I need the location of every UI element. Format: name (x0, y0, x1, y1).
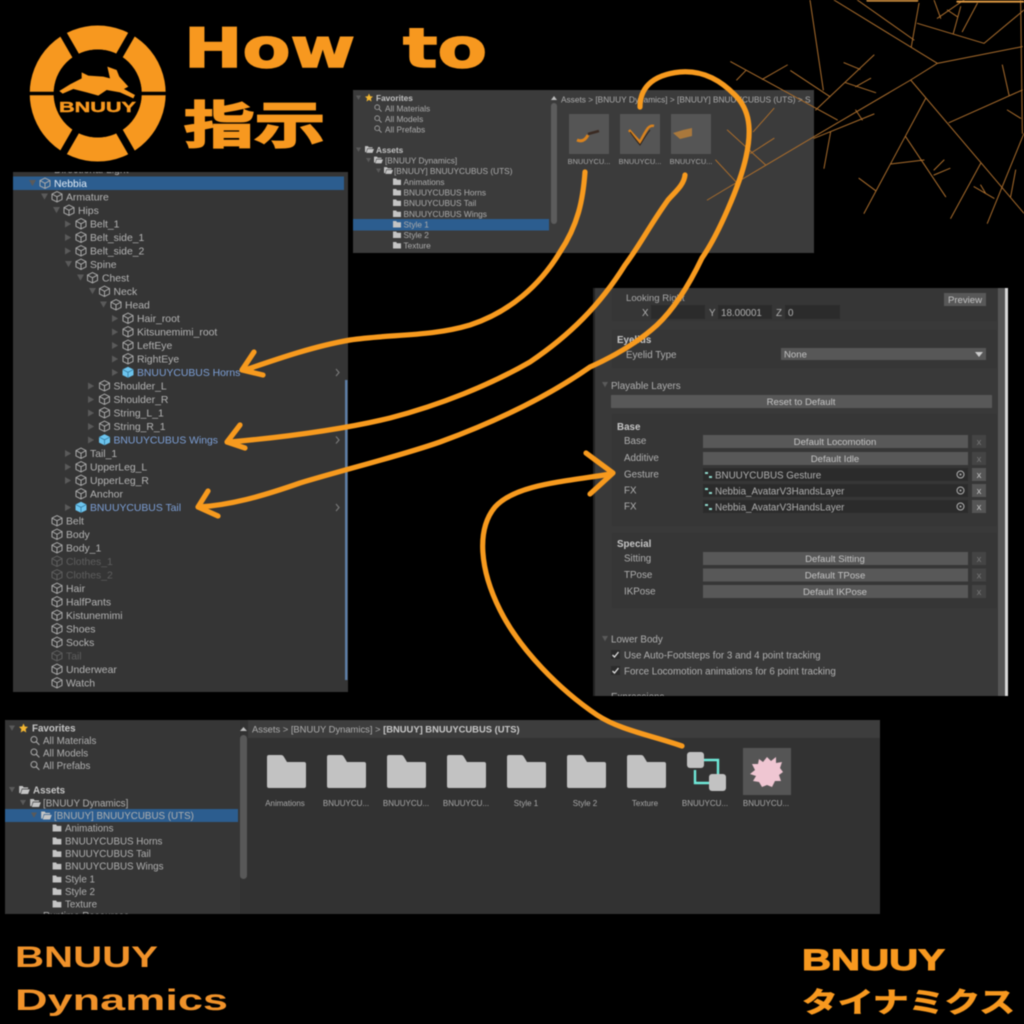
special layers: IKPose (624, 586, 656, 598)
base layers: Nebbia_AvatarV3HandsLayer (715, 486, 845, 498)
folder grid: Animations (265, 799, 305, 808)
base layers (617, 422, 986, 514)
project tree: All Prefabs (43, 761, 90, 772)
project tree: Assets (376, 145, 404, 155)
looking right row: 0 (788, 308, 794, 319)
base layers: Gesture (624, 470, 659, 480)
hierarchy rows: Anchor (90, 489, 123, 500)
hierarchy rows: Chest (102, 273, 129, 284)
footer: BNUUY タイナミクス: タイナミクス (802, 987, 1015, 1018)
base layers: BNUUYCUBUS Gesture (715, 470, 822, 482)
hierarchy rows: Hair_root (137, 314, 180, 325)
footer: BNUUY Dynamics (15, 941, 228, 1017)
project tree: BNUUYCUBUS Horns (65, 836, 163, 848)
project tree: [BNUUY] BNUUYCUBUS (UTS) (394, 166, 513, 176)
hierarchy rows: BNUUYCUBUS Tail (90, 503, 181, 514)
lower body section: Lower Body (611, 634, 663, 646)
project tree: Style 1 (65, 874, 95, 886)
hierarchy rows: Shoulder_R (114, 395, 169, 406)
special layers: Default TPose (805, 570, 865, 582)
project tree: Animations (404, 177, 445, 187)
playable layers: Playable Layers (611, 381, 681, 392)
special layers: TPose (624, 570, 653, 581)
project tree: BNUUYCUBUS Tail (404, 198, 476, 208)
folder grid: Style 1 (514, 799, 539, 808)
base layers: x (977, 502, 982, 513)
project tree: Texture (65, 900, 98, 910)
thumbnail: horns: BNUUYCU... (568, 157, 610, 166)
hierarchy rows: UpperLeg_R (90, 476, 149, 487)
decorative sparks (707, 0, 1024, 223)
base layers: x (977, 470, 982, 481)
special layers: Sitting (624, 554, 651, 564)
lower body section: Use Auto-Footsteps for 3 and 4 point tracking (624, 650, 821, 662)
eyelids section: None (784, 350, 807, 360)
project tree (9, 724, 194, 922)
project tree: BNUUYCUBUS Wings (65, 862, 164, 872)
hierarchy rows: BNUUYCUBUS Wings (114, 435, 218, 446)
project tree: Style 1 (404, 220, 429, 230)
project tree: BNUUYCUBUS Tail (65, 849, 151, 860)
thumbnail: tail (619, 114, 661, 166)
hierarchy rows: Underwear (66, 665, 117, 676)
base layers: FX (624, 486, 637, 496)
thumbnail: horns (568, 114, 610, 166)
special layers: Default IKPose (803, 587, 867, 598)
hierarchy rows: Belt_side_2 (90, 246, 145, 257)
base layers: Nebbia_AvatarV3HandsLayer (715, 502, 845, 514)
hierarchy rows: Shoes (66, 624, 95, 635)
hierarchy rows: UpperLeg_L (90, 462, 147, 473)
logo: BNUUY ring (20, 25, 176, 162)
special layers: x (977, 570, 982, 582)
looking right row: Looking Right (626, 293, 685, 304)
project tree: BNUUYCUBUS Horns (404, 188, 486, 198)
hierarchy rows: LeftEye (137, 341, 172, 352)
folder grid: BNUUYCU... (383, 799, 429, 808)
hierarchy rows: Tail_1 (90, 449, 117, 460)
panel: hierarchy tree: Directional Light (54, 165, 129, 176)
thumbnail: pink texture: BNUUYCU... (743, 799, 789, 808)
hierarchy rows: Clothes_1 (66, 557, 113, 568)
looking right row: 18.00001 (721, 308, 762, 319)
hierarchy rows: String_L_1 (114, 408, 164, 419)
panel: project window, Style 1 (353, 90, 814, 253)
project tree: Favorites (376, 93, 413, 103)
base layers: Additive (624, 453, 659, 464)
folder grid: Texture (632, 799, 659, 808)
icon: animator controller (682, 752, 728, 808)
foldout triangles (29, 180, 339, 511)
hierarchy rows: Head (125, 300, 150, 311)
base layers: x (977, 454, 982, 465)
panel: avatar descriptor inspector (593, 288, 1008, 703)
footer: BNUUY Dynamics: BNUUY (15, 941, 158, 974)
folder grid: BNUUYCU... (323, 799, 369, 808)
base layers: x (977, 486, 982, 497)
lower body section (602, 634, 836, 703)
playable layers: Reset to Default (767, 397, 836, 408)
hierarchy rows: Hair (66, 584, 86, 595)
project tree: Style 2 (404, 230, 429, 240)
base layers: x (977, 437, 982, 448)
hierarchy rows (40, 178, 240, 689)
special layers: Special (617, 539, 652, 550)
hierarchy rows: Watch (66, 678, 95, 689)
hierarchy rows: Shoulder_L (114, 381, 167, 392)
title: How to (184, 17, 487, 80)
hierarchy rows: Belt_1 (90, 219, 120, 230)
thumbnail: pink texture (743, 748, 791, 808)
project tree: All Prefabs (385, 124, 425, 134)
project tree: Animations (65, 824, 114, 834)
project tree: All Materials (385, 104, 430, 114)
project tree: BNUUYCUBUS Wings (404, 209, 487, 219)
hierarchy rows: Kistunemimi (66, 611, 123, 622)
project tree: All Materials (43, 736, 96, 747)
title: 指示: 指示 (184, 98, 325, 154)
hierarchy rows: Armature (66, 192, 109, 203)
thumbnail: wings: BNUUYCU... (670, 157, 712, 166)
hierarchy rows: Nebbia (54, 179, 87, 190)
looking right row: Y (709, 308, 716, 319)
title: How to: How (184, 17, 355, 80)
title: How to: to (403, 17, 487, 80)
hierarchy rows: BNUUYCUBUS Horns (137, 368, 240, 379)
hierarchy rows: Neck (114, 287, 138, 298)
hierarchy rows: Body (66, 530, 90, 541)
icon: animator controller: BNUUYCU... (682, 799, 728, 808)
project tree: [BNUUY] BNUUYCUBUS (UTS) (54, 811, 194, 822)
hierarchy rows: RightEye (137, 354, 179, 365)
looking right row: Z (776, 308, 782, 319)
project tree: Runtime Resources (43, 911, 129, 922)
looking right row: X (642, 308, 649, 319)
hierarchy rows: Tail (66, 651, 82, 662)
project tree: Style 2 (65, 887, 95, 898)
special layers: Default Sitting (805, 554, 865, 565)
icon: rabbit (59, 67, 135, 98)
hierarchy rows: Spine (90, 260, 117, 271)
hierarchy rows: Clothes_2 (66, 570, 113, 581)
panel: hierarchy tree (13, 165, 348, 692)
footer: BNUUY タイナミクス: BNUUY (802, 944, 945, 977)
eyelids section: Eyelids (617, 335, 652, 346)
footer: BNUUY タイナミクス (802, 944, 1015, 1018)
base layers: Default Locomotion (794, 437, 876, 448)
project tree: All Models (385, 114, 423, 124)
base layers: Default Idle (811, 454, 859, 465)
looking right row (626, 293, 986, 319)
breadcrumb: Assets > [BNUUY Dynamics] > [BNUUY] BNUUYCUBUS (UTS) (252, 724, 520, 734)
looking right row: Preview (948, 295, 982, 306)
lower body section: Force Locomotion animations for 6 point tracking (624, 666, 836, 678)
arrow: to Horns (242, 172, 585, 375)
arrow: to Wings (227, 175, 685, 448)
lower body section: Expressions (611, 692, 664, 703)
eyelids section (617, 335, 986, 361)
base layers: FX (624, 502, 637, 512)
folder grid: Style 2 (573, 799, 598, 808)
base layers: Base (624, 436, 647, 447)
playable layers (602, 381, 992, 408)
arrow: to Tail (198, 72, 749, 516)
hierarchy rows: Belt_side_1 (90, 233, 145, 244)
special layers (617, 539, 986, 598)
hierarchy rows: HalfPants (66, 597, 111, 608)
project tree: [BNUUY Dynamics] (385, 156, 457, 166)
arrow: to Gesture slot (483, 453, 682, 746)
panel: project window, Style 1: Assets > [BNUUY Dynamics] > [BNUUY] BNUUYCUBUS (UTS) > S (561, 94, 811, 104)
project tree: All Models (43, 748, 88, 760)
folder grid (265, 755, 666, 808)
panel: project window, BNUUYCUBUS (5, 720, 880, 922)
thumbnail: wings (670, 114, 712, 166)
logo: BNUUY ring: BNUUY (59, 100, 136, 116)
hierarchy rows: Belt (66, 516, 84, 527)
base layers: Base (617, 422, 641, 433)
hierarchy rows: Socks (66, 638, 94, 649)
eyelids section: Eyelid Type (626, 350, 677, 361)
special layers: x (977, 587, 982, 598)
folder grid: BNUUYCU... (443, 799, 489, 808)
hierarchy rows: Hips (78, 206, 99, 217)
project tree: [BNUUY Dynamics] (43, 798, 129, 810)
hierarchy rows: Kitsunemimi_root (137, 327, 217, 338)
hierarchy rows: Body_1 (66, 543, 101, 554)
thumbnail: tail: BNUUYCU... (619, 157, 661, 166)
footer: BNUUY Dynamics: Dynamics (15, 984, 228, 1017)
project tree (356, 93, 513, 250)
special layers: x (977, 554, 982, 565)
project tree: Assets (33, 786, 66, 796)
hierarchy rows: String_R_1 (114, 422, 166, 433)
project tree: Texture (404, 240, 431, 250)
project tree: Favorites (32, 724, 76, 734)
